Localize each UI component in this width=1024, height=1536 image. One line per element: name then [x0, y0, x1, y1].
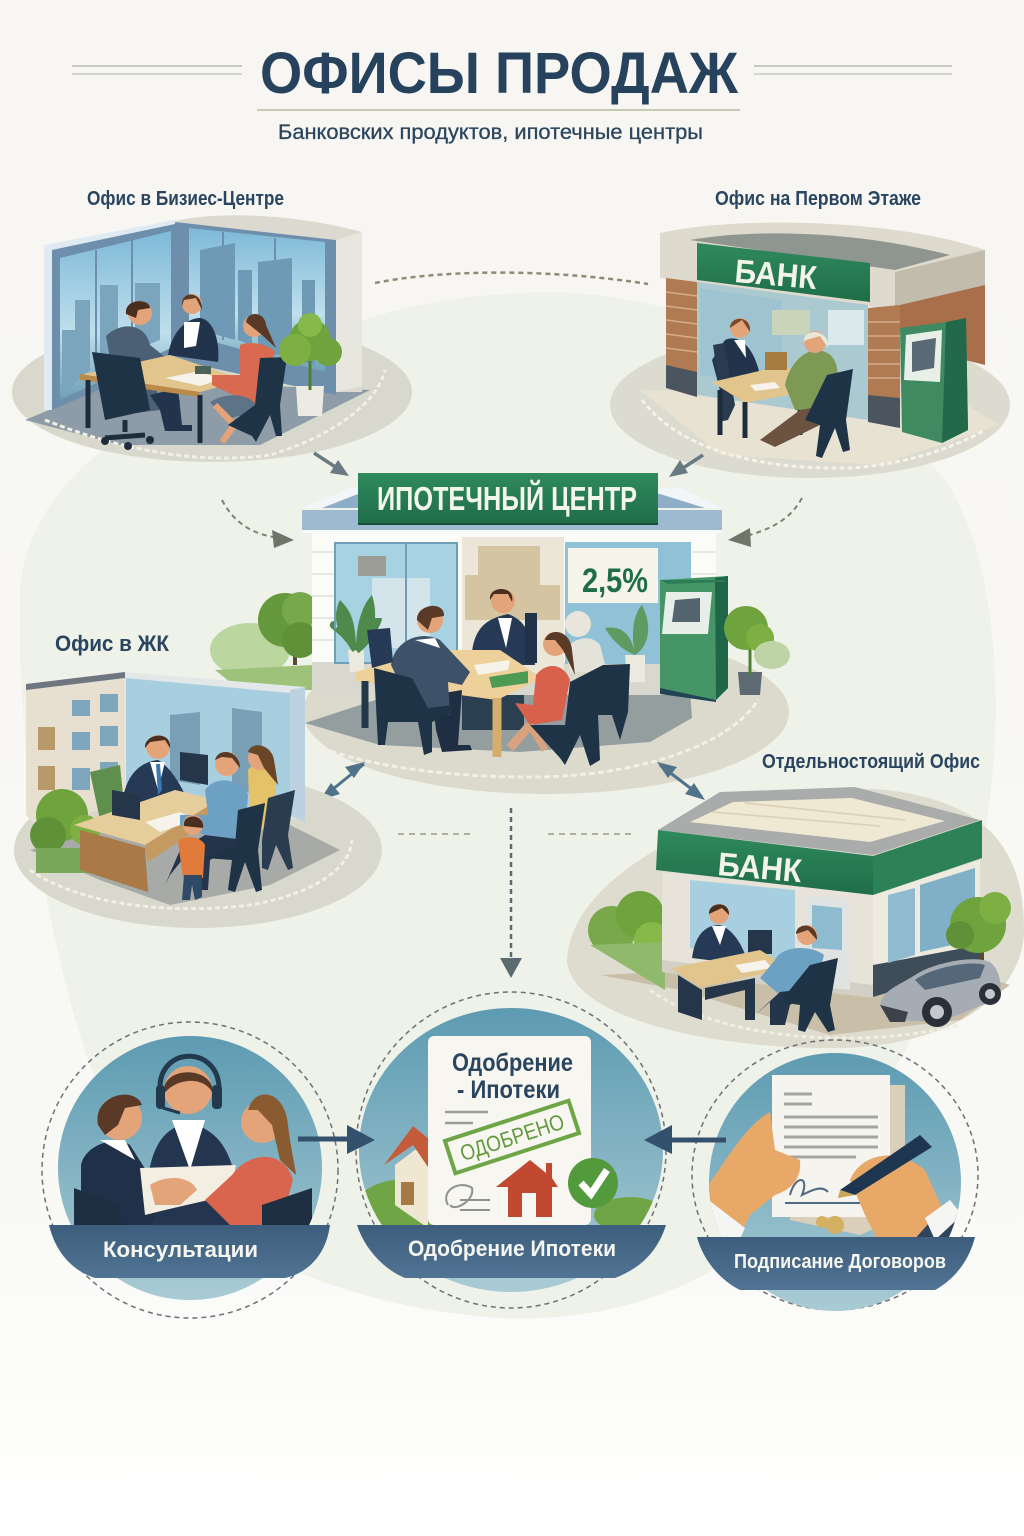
person: operator with headset	[150, 1054, 232, 1225]
label: standalone: Отдельностоящий Офис	[762, 751, 980, 773]
label: residential: Офис в ЖК	[55, 631, 170, 656]
document: - Ипотеки	[457, 1076, 560, 1104]
sign rate: 2,5%	[582, 562, 648, 600]
person: man back center	[391, 606, 472, 752]
car	[880, 959, 1001, 1027]
walls	[662, 872, 873, 995]
arrows from center	[320, 762, 705, 800]
chairs	[74, 1188, 312, 1225]
arrows to center	[222, 453, 802, 548]
chairs right center	[530, 664, 630, 766]
right hand	[850, 1156, 942, 1237]
chairs	[205, 803, 265, 892]
panel: consultation	[42, 1022, 338, 1318]
bush	[30, 789, 100, 873]
document heading: Одобрение	[452, 1049, 573, 1077]
chair left	[92, 352, 154, 450]
signature	[446, 1185, 490, 1210]
tree right	[946, 892, 1011, 965]
panel: ground floor office	[610, 188, 1010, 478]
document	[428, 1036, 618, 1225]
person: elderly client	[760, 331, 838, 447]
client woman	[248, 745, 278, 830]
person: woman client	[210, 314, 276, 442]
label: business center: Офис в Бизиес-Центре	[87, 188, 284, 210]
dashed arrow down	[398, 808, 636, 978]
panel: standalone office: БАНК	[716, 845, 804, 889]
subtitle: Банковских продуктов, ипотечные центры	[278, 121, 703, 144]
panel: business center office	[12, 188, 412, 462]
bush left	[588, 891, 670, 990]
table	[712, 352, 815, 438]
panel: contract signing: Подписание Договоров	[734, 1251, 946, 1273]
stamp: ОДОБРЕНО	[457, 1109, 567, 1166]
check badge	[568, 1158, 618, 1208]
table center	[356, 650, 542, 757]
chair client	[805, 369, 853, 458]
dashed connector top	[375, 273, 648, 284]
person: woman center	[510, 632, 575, 750]
panel: mortgage approval: Одобрение Ипотеки	[408, 1236, 616, 1261]
pen	[840, 1135, 932, 1195]
chair right	[228, 357, 287, 442]
person: consultant	[712, 318, 760, 390]
person: man	[81, 1094, 146, 1225]
desk	[74, 752, 218, 892]
red house	[496, 1160, 558, 1217]
chair back center	[367, 628, 452, 755]
plant right	[605, 605, 648, 682]
keys	[816, 1216, 844, 1234]
left hand	[705, 1112, 800, 1245]
sign rate	[568, 548, 658, 603]
panel: mortgage approval	[356, 992, 666, 1308]
plant	[279, 313, 342, 416]
hand	[150, 1178, 197, 1205]
building	[302, 488, 722, 695]
panel: mortgage center	[210, 473, 790, 794]
plant left	[334, 595, 378, 672]
sign mortgage center	[358, 473, 658, 525]
title: ОФИСЫ ПРОДАЖ	[260, 41, 739, 106]
small house	[365, 1126, 653, 1225]
panel: consultation: Консультации	[103, 1237, 258, 1262]
person: consultant center	[472, 589, 537, 665]
label: ground floor: Офис на Первом Этаже	[715, 188, 921, 210]
trees left	[210, 592, 318, 690]
panel: residential complex office	[14, 631, 382, 928]
arrow: consultation to approval	[298, 1125, 375, 1154]
chair consultant	[713, 343, 735, 422]
green chair	[90, 765, 125, 820]
person: woman consultant	[168, 294, 218, 362]
ATM	[900, 318, 968, 443]
sign mortgage center: ИПОТЕЧНЫЙ ЦЕНТР	[377, 479, 637, 517]
person: client	[755, 925, 824, 1025]
ATM center	[660, 576, 728, 702]
child	[178, 815, 205, 900]
sign bank	[697, 243, 870, 302]
panel: standalone office	[567, 751, 1024, 1048]
background blob	[20, 292, 996, 1318]
panel: contract signing	[692, 1040, 978, 1311]
person: consultant	[122, 735, 190, 805]
client man	[165, 752, 248, 890]
plant by ATM	[724, 606, 790, 695]
meeting table	[80, 355, 245, 443]
person: elderly man center	[565, 611, 607, 672]
arrow: signing to approval	[644, 1125, 726, 1154]
person: woman	[205, 1094, 296, 1225]
open folder	[140, 1165, 236, 1215]
person: consultant	[692, 904, 772, 965]
chair	[780, 958, 838, 1032]
roof	[658, 787, 980, 855]
desk	[671, 950, 790, 1024]
sign bank: БАНК	[733, 252, 819, 296]
document signing	[772, 1075, 905, 1235]
person: man back view	[106, 301, 192, 431]
